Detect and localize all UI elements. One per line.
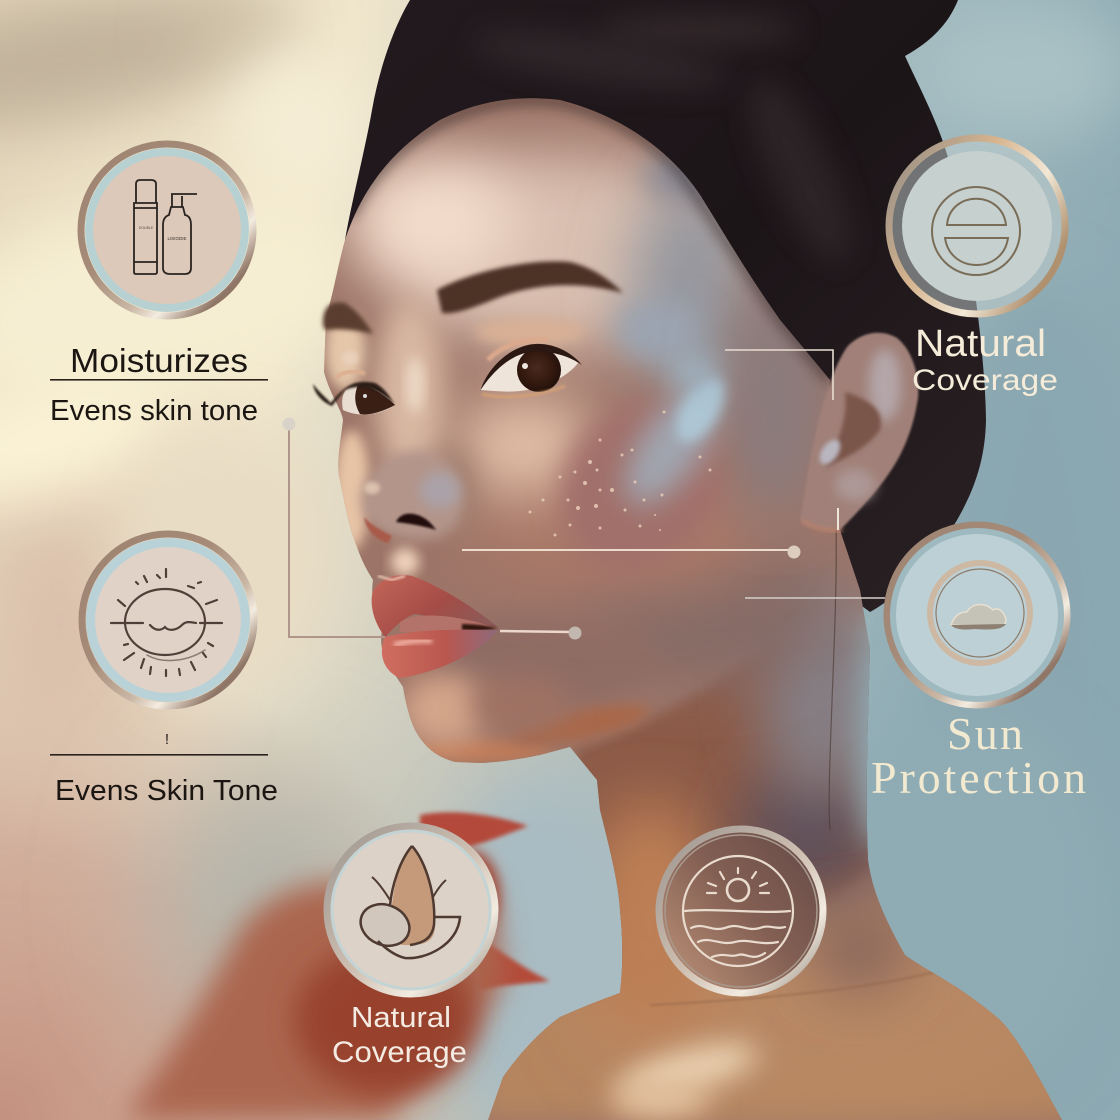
label: Natural Coverage right: Coverage	[912, 364, 1058, 397]
label: Natural Coverage bottom: Natural	[351, 1002, 451, 1034]
nose	[360, 357, 473, 576]
connector lines and dots	[282, 350, 885, 640]
ear	[800, 333, 918, 531]
blue fade on the right edge of the neck	[840, 610, 870, 858]
icon: coverage circle	[889, 138, 1065, 314]
label: Natural Coverage bottom: Coverage	[332, 1036, 467, 1069]
label: exclamation mark and Evens Skin Tone: !	[165, 731, 169, 748]
label: Moisturizes / Evens skin tone: Evens skin tone	[50, 395, 258, 427]
icon: moisturizer bottles	[81, 144, 253, 316]
right eye and brow	[437, 261, 623, 397]
icon: almond drop	[327, 826, 495, 994]
lips	[372, 575, 498, 678]
label: Sun Protection: Protection	[871, 752, 1086, 803]
icon: sun over waves	[659, 829, 823, 993]
icon: sun outline	[82, 534, 254, 706]
label: exclamation mark and Evens Skin Tone: Evens Skin Tone	[55, 775, 278, 807]
icon: cloud in ring	[887, 525, 1067, 705]
hair sheen	[468, 16, 869, 273]
label: Moisturizes / Evens skin tone: Moisturizes	[70, 342, 248, 379]
label: Sun Protection	[871, 708, 1086, 803]
soft hair shadow along hairline	[350, 100, 830, 380]
icon: moisturizer bottles: LISIODIE	[167, 236, 187, 241]
label: Natural Coverage right: Natural	[915, 323, 1046, 365]
icon: moisturizer bottles: DOUBLE	[139, 226, 154, 230]
label: Natural Coverage right	[912, 323, 1058, 397]
label: Sun Protection: Sun	[947, 708, 1023, 759]
hair	[345, 0, 986, 612]
cheek shimmer freckles	[528, 410, 712, 536]
label: Natural Coverage bottom	[332, 1002, 467, 1069]
label: Moisturizes / Evens skin tone	[50, 342, 268, 427]
label: exclamation mark and Evens Skin Tone	[50, 731, 278, 807]
face, neck and shoulders	[324, 98, 1062, 1120]
hand with red nails	[125, 812, 550, 1120]
earring thread	[829, 530, 836, 830]
left eye and brow	[313, 302, 395, 415]
